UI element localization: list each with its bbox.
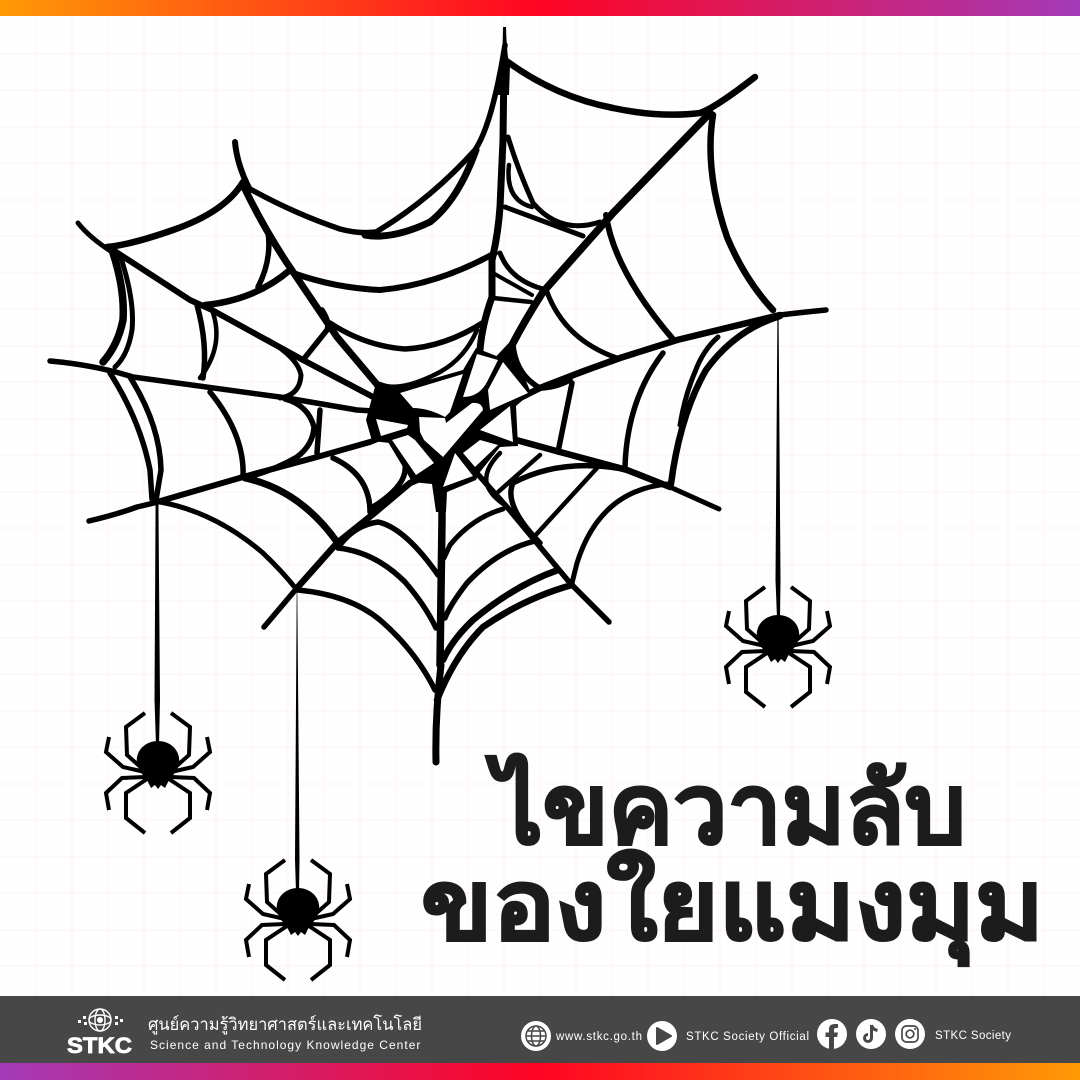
- youtube name: STKC Society Official: [686, 1031, 809, 1043]
- title: ของใยแมงมุม: [421, 850, 1044, 967]
- spider left: [106, 713, 210, 833]
- website: www.stkc.go.th: [555, 1031, 642, 1043]
- title: [421, 753, 1044, 967]
- web: lower-left concentric threads: [110, 373, 438, 690]
- STKC logo: STKC: [67, 1033, 132, 1058]
- icon: tiktok: [856, 1019, 886, 1049]
- STKC logo: [67, 1009, 132, 1058]
- web: right and upper-right concentric threads: [493, 137, 672, 467]
- spider thread right: [776, 318, 780, 618]
- footer band: [0, 996, 1080, 1063]
- bottom gradient bar: [0, 1063, 1080, 1080]
- web: central hub: [366, 345, 531, 512]
- center name: ศูนย์ความรู้วิทยาศาสตร์และเทคโนโลยี: [148, 1014, 422, 1035]
- center name: Science and Technology Knowledge Center: [150, 1038, 421, 1052]
- spider right: [726, 587, 830, 707]
- title: ไขความลับ: [485, 753, 966, 864]
- web: lower-right concentric threads: [437, 453, 668, 700]
- spider thread left: [154, 500, 160, 745]
- icon: play: [647, 1021, 677, 1051]
- icon: instagram: [895, 1019, 925, 1049]
- spider web: [50, 27, 826, 762]
- social name: STKC Society: [935, 1030, 1011, 1042]
- top gradient bar: [0, 0, 1080, 16]
- web: radial spokes: [50, 60, 780, 665]
- spider thread middle: [295, 592, 300, 892]
- center name: [148, 1014, 422, 1052]
- web: outer rim threads: [78, 27, 826, 762]
- icon: facebook: [817, 1019, 847, 1049]
- spider middle: [246, 860, 350, 980]
- icon: globe: [521, 1021, 551, 1051]
- web: upper-left concentric threads: [103, 232, 495, 398]
